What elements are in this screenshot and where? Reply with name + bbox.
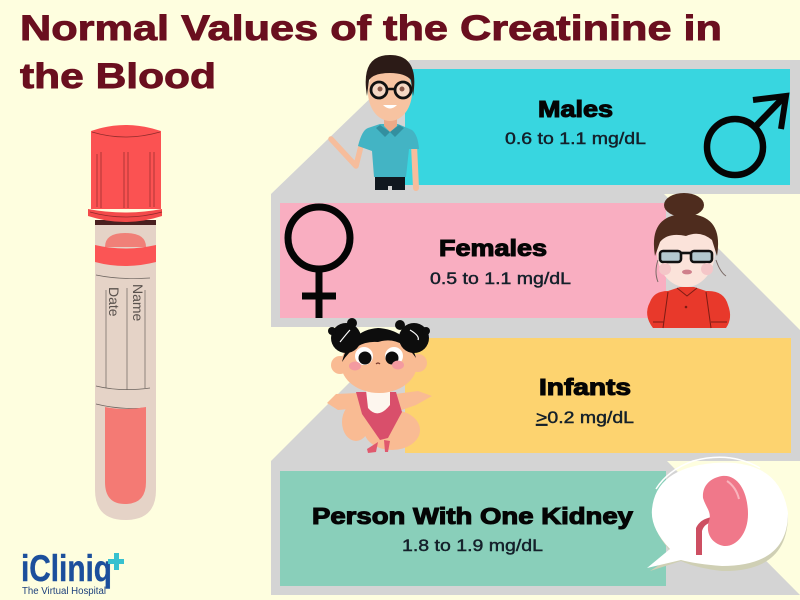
icon: blood test tube [88, 125, 162, 520]
tube blood [105, 407, 146, 504]
tube label: Name [130, 284, 146, 322]
title [20, 9, 722, 96]
heading: males: Males [538, 96, 613, 122]
icon: woman figure [647, 193, 730, 328]
heading: infants: Infants [539, 374, 631, 400]
logo: iCliniq: iCliniq [21, 548, 112, 589]
kidney [696, 476, 748, 555]
tube label [96, 275, 150, 408]
tube label: Date [106, 287, 122, 317]
value: females: 0.5 to 1.1 mg/dL [430, 269, 571, 288]
value: males: 0.6 to 1.1 mg/dL [505, 129, 646, 148]
panel: females [280, 203, 666, 318]
panel: infants [405, 338, 791, 453]
heading: females: Females [439, 235, 547, 261]
value: person with one kidney: 1.8 to 1.9 mg/dL [402, 536, 543, 555]
icon: baby figure [327, 318, 432, 453]
tube dark ring [95, 220, 156, 225]
panel: person with one kidney [280, 471, 666, 586]
icon: female symbol [288, 207, 350, 318]
logo tagline: The Virtual Hospital [22, 586, 106, 597]
tube red band [95, 245, 156, 266]
tube cap [91, 125, 161, 209]
value: infants: >0.2 mg/dL [536, 408, 634, 427]
icon: kidney speech bubble [647, 457, 788, 571]
icon: man figure [331, 55, 419, 190]
panel: males [405, 69, 790, 185]
icon: male symbol [707, 96, 786, 175]
tube liquid top [105, 233, 146, 247]
logo plus [108, 553, 124, 570]
gray stepped background [271, 60, 800, 595]
title: the Blood [20, 57, 216, 96]
heading: person with one kidney: Person With One Kidney [312, 503, 633, 529]
title: Normal Values of the Creatinine in [20, 9, 722, 48]
